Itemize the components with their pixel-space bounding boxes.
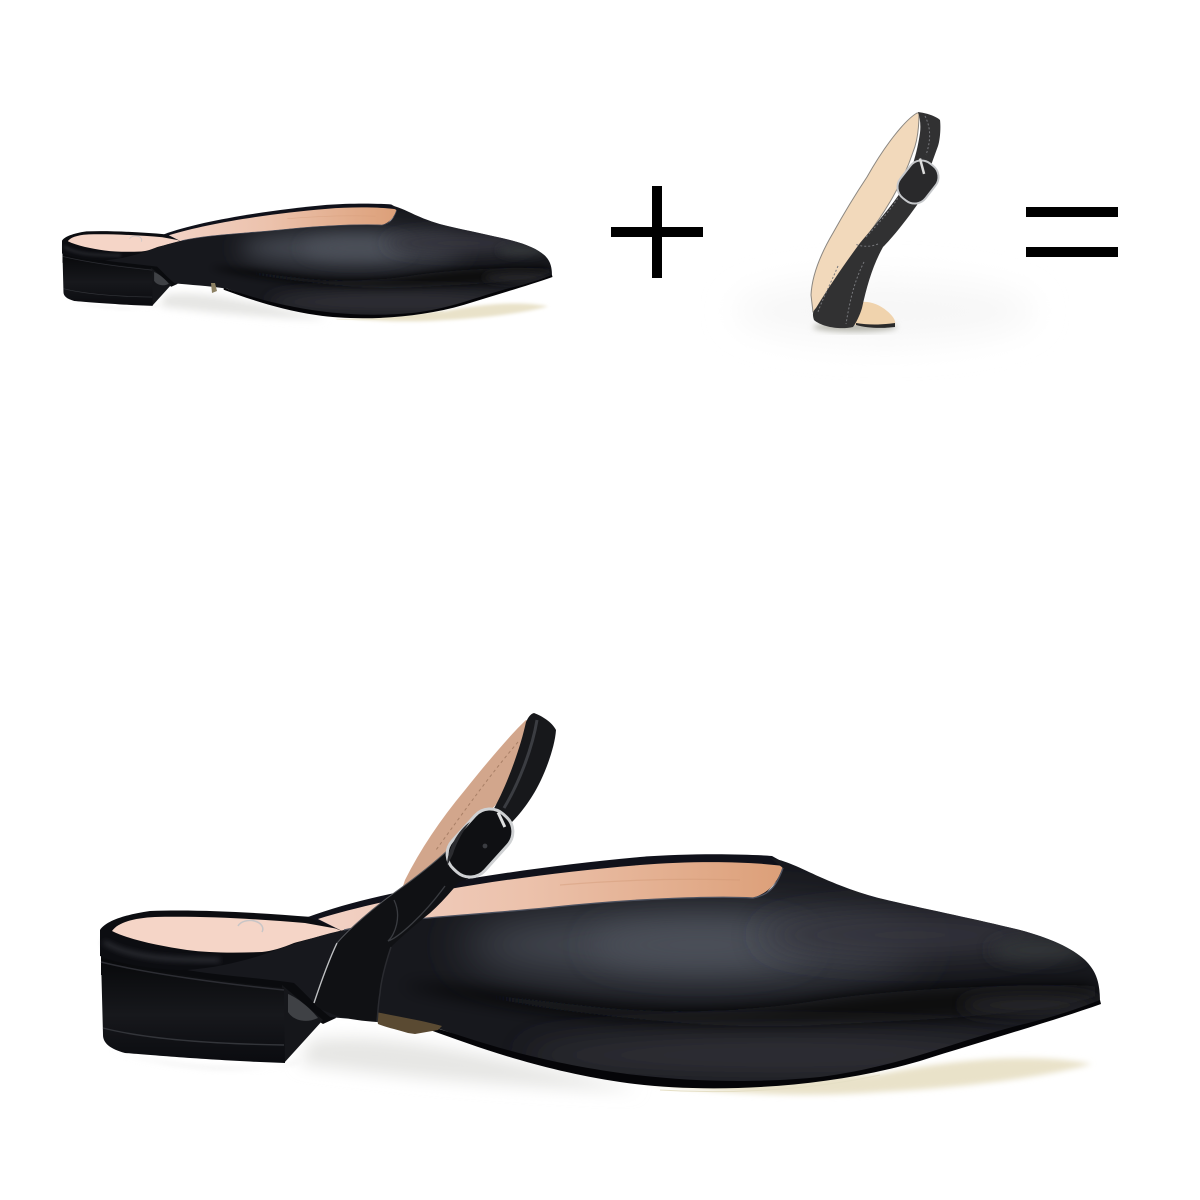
infographic canvas bbox=[62, 112, 1118, 1098]
strap lower band bbox=[314, 850, 473, 1022]
small shoe pin bbox=[211, 283, 217, 293]
detachable ankle strap bbox=[735, 112, 1035, 343]
strap buckle bbox=[892, 155, 944, 209]
plus sign bbox=[611, 186, 703, 278]
strap outer leather bbox=[813, 112, 940, 328]
bottom pin bbox=[376, 1012, 442, 1034]
strap inner lining bbox=[811, 113, 919, 312]
strap tab bbox=[855, 302, 895, 326]
assembled shoe with strap bbox=[100, 713, 1110, 1100]
strap upper section bbox=[492, 713, 556, 822]
buckle ring and tab bbox=[439, 801, 521, 885]
strap shadow bbox=[735, 279, 1035, 343]
strap lining bbox=[401, 720, 533, 892]
equals sign bbox=[1026, 207, 1118, 257]
small backless mule shoe bbox=[62, 202, 557, 324]
